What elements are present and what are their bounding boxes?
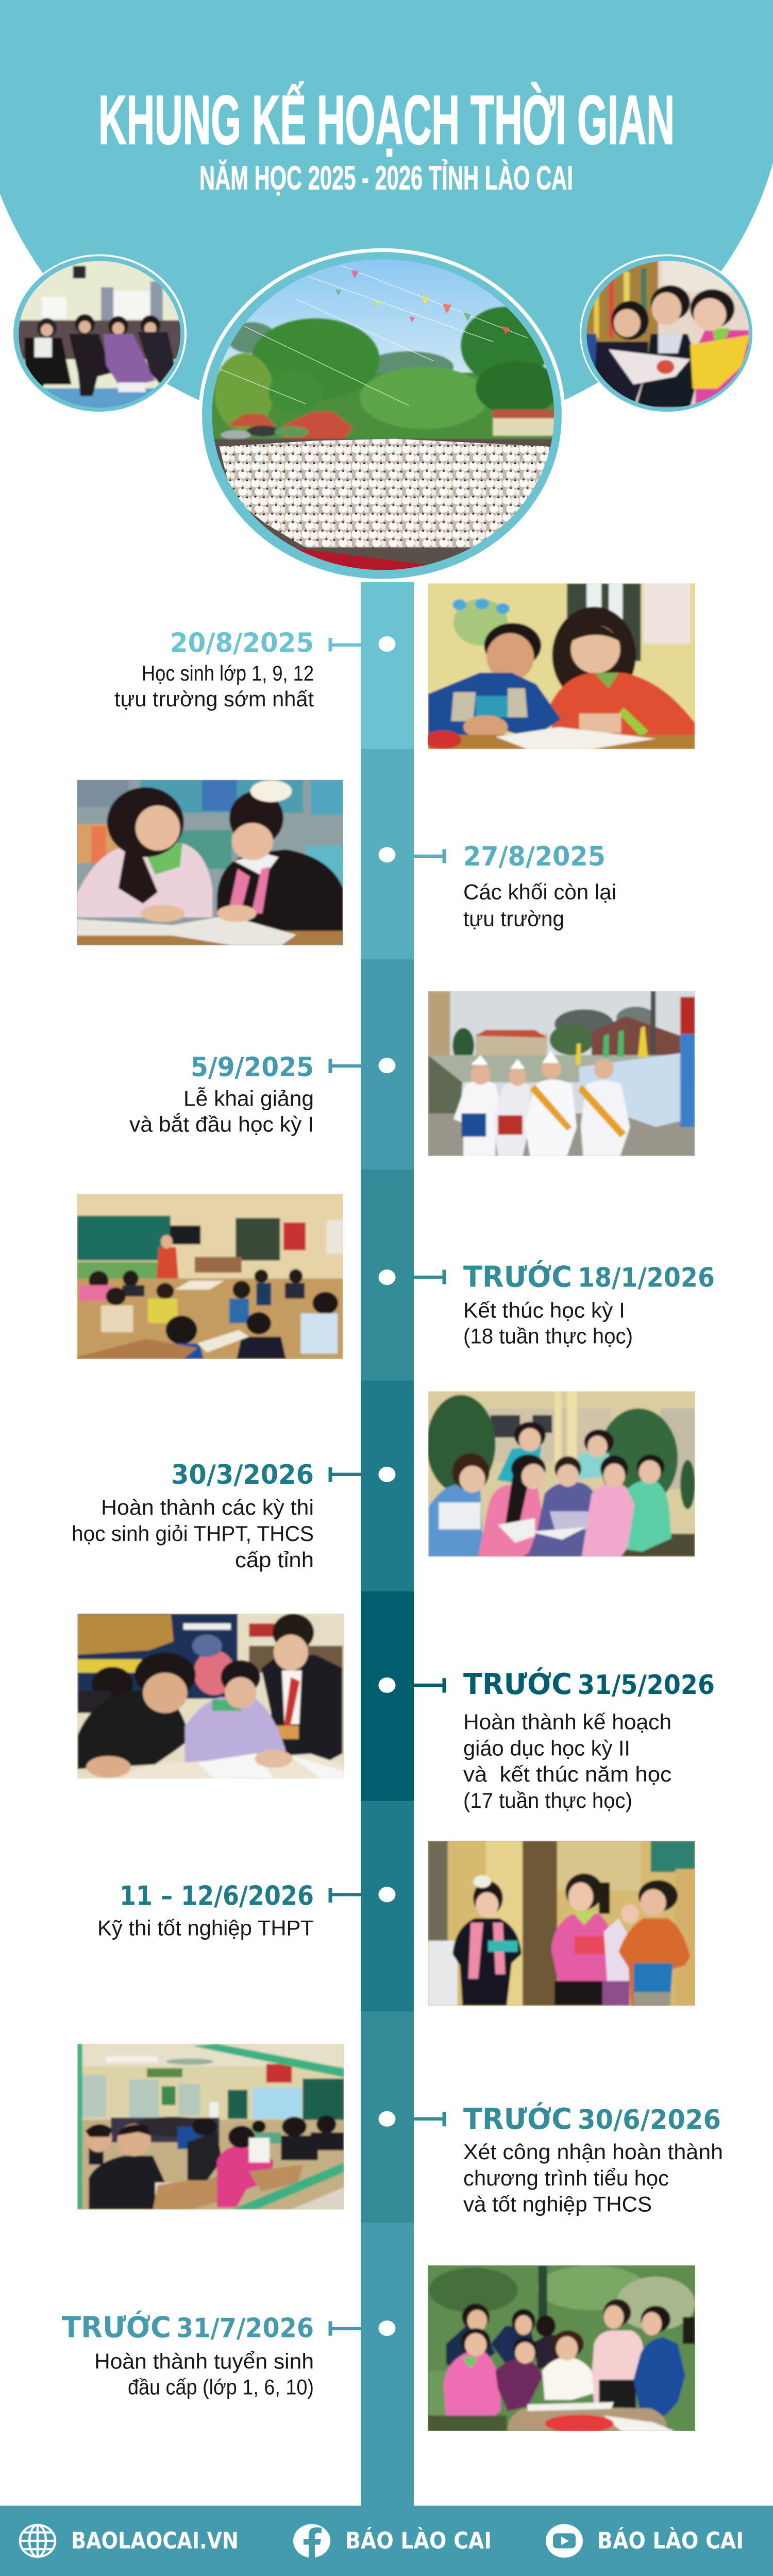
event 4: before 18/1/2026: (18 tuần thực học) [463, 1324, 633, 1348]
event 8: before 30/6/2026 [378, 2102, 723, 2216]
event 6: before 31/5/2026: Hoàn thành kế hoạch [463, 1710, 671, 1734]
header background circle [0, 0, 773, 440]
photo 6: teacher guiding students [74, 1610, 347, 1783]
event 1: 20/8/2025: 20/8/2025 [170, 627, 314, 658]
timeline bar [361, 582, 414, 2509]
event 4: before 18/1/2026 [378, 1260, 715, 1348]
website label: BAOLAOCAI.VN [71, 2528, 239, 2554]
event 6: before 31/5/2026 [378, 1667, 715, 1813]
photo 1: teacher and boy writing [424, 582, 700, 752]
event 4: before 18/1/2026: 18/1/2026 [578, 1262, 715, 1293]
event 9: before 31/7/2026: Hoàn thành tuyển sinh [94, 2349, 314, 2374]
event 7: 11 – 12/6/2026 [97, 1880, 396, 1940]
event 6: before 31/5/2026: giáo dục học kỳ II [463, 1736, 630, 1760]
event 2: 27/8/2025: 27/8/2025 [463, 840, 606, 872]
event 3: 5/9/2025: 5/9/2025 [191, 1052, 314, 1082]
event 1: 20/8/2025: tựu trường sớm nhất [114, 687, 314, 711]
event 9: before 31/7/2026: đầu cấp (lớp 1, 6, 10) [128, 2375, 314, 2399]
event 6: before 31/5/2026: TRƯỚC [463, 1667, 572, 1701]
icon: youtube [546, 2524, 583, 2558]
event 8: before 30/6/2026: TRƯỚC [463, 2102, 572, 2136]
event 6: before 31/5/2026: (17 tuần thực học) [463, 1789, 632, 1813]
event 1: 20/8/2025 [114, 627, 395, 711]
event 5: 30/3/2026 [72, 1459, 396, 1572]
event 8: before 30/6/2026: chương trình tiểu học [463, 2166, 669, 2190]
event 8: before 30/6/2026: và tốt nghiệp THCS [463, 2193, 652, 2216]
event 9: before 31/7/2026: 31/7/2026 [176, 2312, 314, 2344]
icon: globe [20, 2525, 55, 2557]
event 8: before 30/6/2026: Xét công nhận hoàn thành [463, 2140, 723, 2164]
event 4: before 18/1/2026: Kết thúc học kỳ I [463, 1298, 625, 1323]
event 4: before 18/1/2026: TRƯỚC [463, 1260, 572, 1294]
event 5: 30/3/2026: cấp tỉnh [235, 1548, 314, 1572]
event 5: 30/3/2026: Hoàn thành các kỳ thi [101, 1496, 314, 1520]
event 7: 11 – 12/6/2026: Kỹ thi tốt nghiệp THPT [97, 1916, 314, 1940]
event 8: before 30/6/2026: 30/6/2026 [578, 2104, 721, 2135]
event 5: 30/3/2026: học sinh giỏi THPT, THCS [72, 1522, 314, 1546]
event 3: 5/9/2025 [129, 1052, 395, 1137]
event 7: 11 – 12/6/2026: 11 – 12/6/2026 [120, 1880, 314, 1911]
event 6: before 31/5/2026: và kết thúc năm học [463, 1762, 671, 1787]
footer [0, 2506, 773, 2576]
event 2: 27/8/2025: tựu trường [463, 907, 564, 931]
event 3: 5/9/2025: Lễ khai giảng [183, 1087, 314, 1111]
photo 3: student parade in front of school [424, 989, 700, 1160]
event 2: 27/8/2025 [378, 840, 616, 931]
main photo circle: school opening ceremony [198, 248, 565, 582]
photo 2: two students in library [74, 777, 345, 948]
event 2: 27/8/2025: Các khối còn lại [463, 880, 616, 904]
event 9: before 31/7/2026: TRƯỚC [62, 2310, 171, 2344]
icon: facebook [293, 2524, 330, 2558]
photo 9: teacher and students around stone table [424, 2263, 700, 2433]
photo 7: teachers in corridor [424, 1838, 700, 2010]
photo circle right: children reading [580, 255, 754, 413]
event 9: before 31/7/2026 [62, 2310, 396, 2399]
photo 4: primary classroom [74, 1191, 345, 1361]
event 1: 20/8/2025: Học sinh lớp 1, 9, 12 [142, 662, 314, 685]
photo 5: group of girls outside school [424, 1388, 700, 1561]
photo 8: students in exam classroom [74, 2041, 347, 2212]
event 5: 30/3/2026: 30/3/2026 [171, 1459, 314, 1490]
facebook label: BÁO LÀO CAI [345, 2527, 492, 2554]
photo circle left: students seated in hall [12, 255, 187, 413]
event 3: 5/9/2025: và bắt đầu học kỳ I [129, 1112, 314, 1137]
event 6: before 31/5/2026: 31/5/2026 [578, 1669, 715, 1701]
